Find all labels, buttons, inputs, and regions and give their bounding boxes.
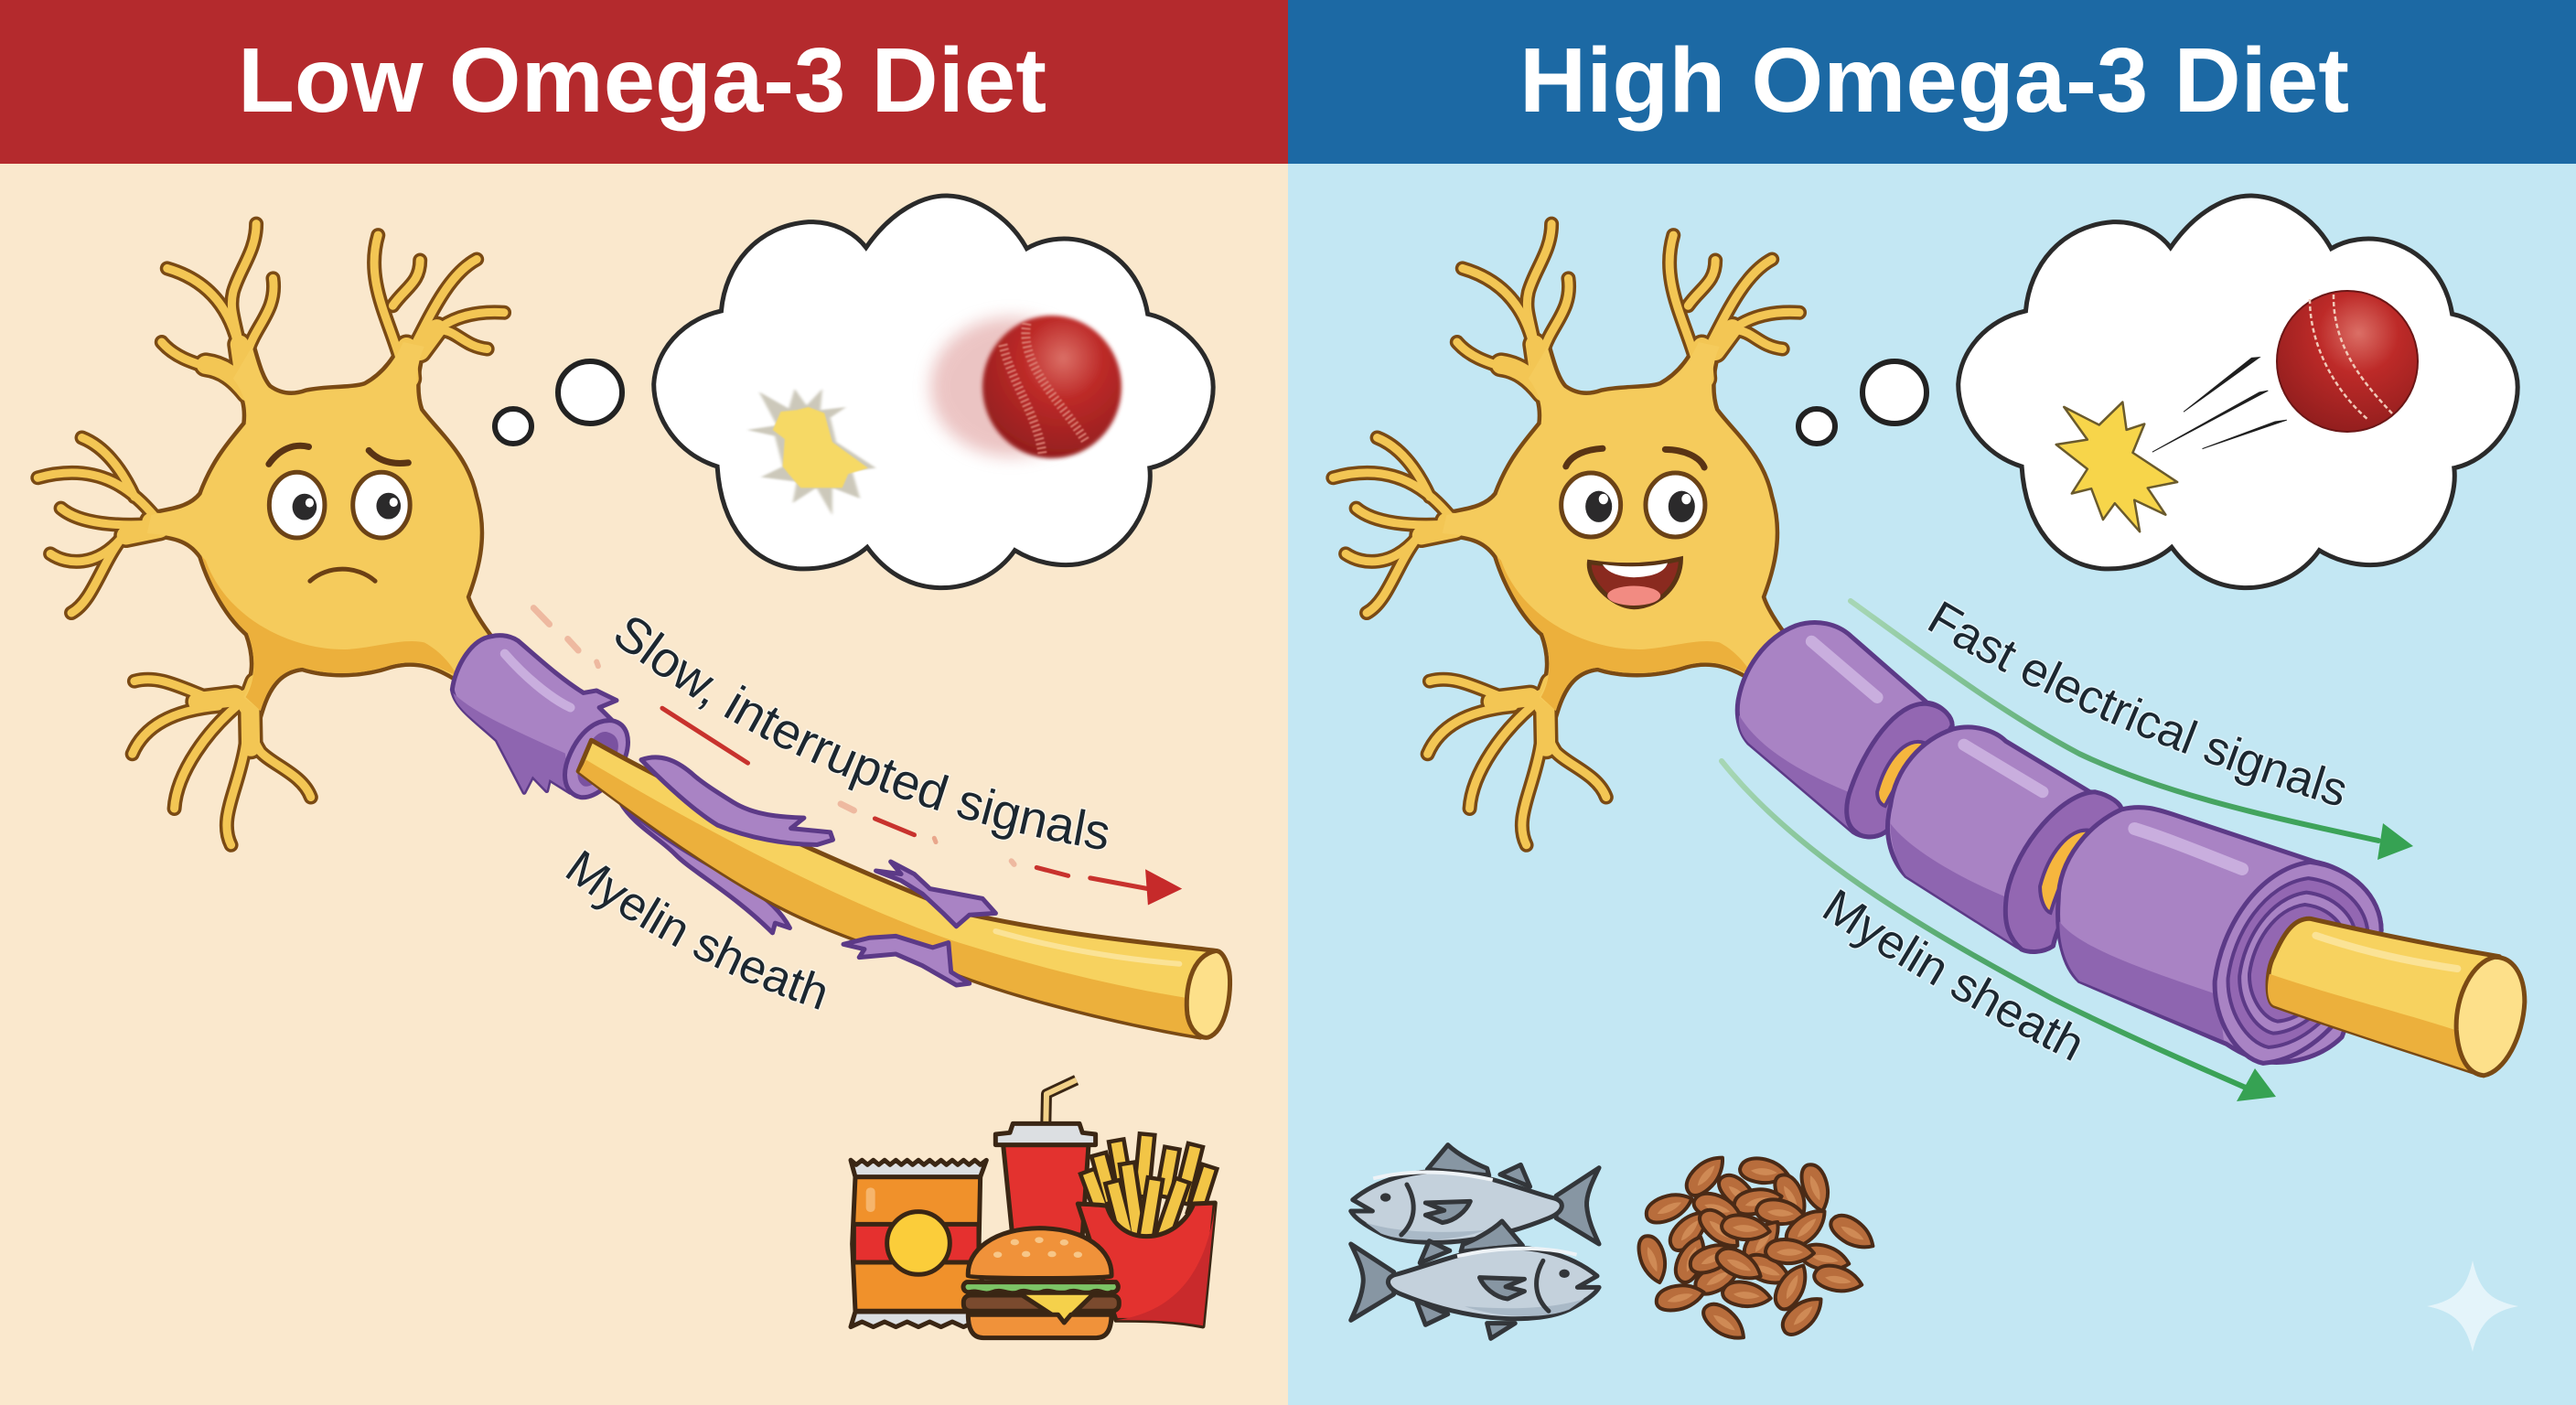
axon with healthy myelin (1737, 623, 2525, 1076)
chips bag (851, 1160, 986, 1327)
label: myelin sheath: Myelin sheath (564, 849, 827, 1012)
icon: flax seeds (1634, 1149, 1880, 1346)
icon: sharp spark (2056, 358, 2287, 531)
myelin segment 3 (2058, 808, 2381, 1062)
neuron: happy cell body (1333, 224, 1799, 845)
icon: blurred spark (747, 389, 876, 515)
torn myelin shreds (641, 757, 832, 844)
motion lines (2152, 358, 2287, 452)
happy face (1562, 448, 1705, 607)
exposed axon (578, 740, 1217, 1037)
heading: high omega-3 diet: High Omega-3 Diet (1519, 29, 2349, 132)
label: fast electrical signals: Fast electrical signals (1927, 599, 2346, 807)
arrow: fast signal upper (1851, 601, 2413, 860)
icon: fish (1351, 1145, 1599, 1338)
label: slow interrupted signals: Slow, interrupted signals (615, 617, 1110, 851)
intact myelin segment (452, 636, 617, 792)
burger (963, 1228, 1119, 1338)
axon with damaged myelin (452, 636, 1230, 1037)
arrow: slow interrupted signal (533, 608, 1182, 905)
icon: junk food (851, 1080, 1215, 1338)
heading: low omega-3 diet: Low Omega-3 Diet (238, 29, 1046, 132)
myelin end rings (2215, 862, 2381, 1063)
icon: sparkle watermark (2427, 1260, 2518, 1352)
fries (1078, 1142, 1215, 1326)
icon: blurred cricket ball (930, 316, 1122, 458)
label: myelin sheath: Myelin sheath (1820, 887, 2081, 1063)
exposed axon end (2268, 918, 2499, 1076)
panel: high omega-3 diet (1288, 0, 2576, 1405)
soft drink cup (995, 1080, 1096, 1235)
arrow: fast signal lower (1722, 761, 2276, 1101)
lower shred behind axon (620, 802, 789, 933)
neuron: sad cell body (38, 224, 504, 845)
thought bubbles (495, 196, 1213, 588)
lower fish (1351, 1221, 1599, 1338)
panel: low omega-3 diet (0, 0, 1288, 1341)
myelin segment 2 (1887, 727, 2121, 951)
heading: high omega-3 diet (1288, 0, 2576, 164)
myelin segment 1 (1737, 623, 1952, 837)
icon: cricket ball (2277, 291, 2418, 432)
heading: low omega-3 diet (0, 0, 1288, 164)
sad face (269, 445, 410, 581)
thought bubbles (1798, 196, 2517, 588)
